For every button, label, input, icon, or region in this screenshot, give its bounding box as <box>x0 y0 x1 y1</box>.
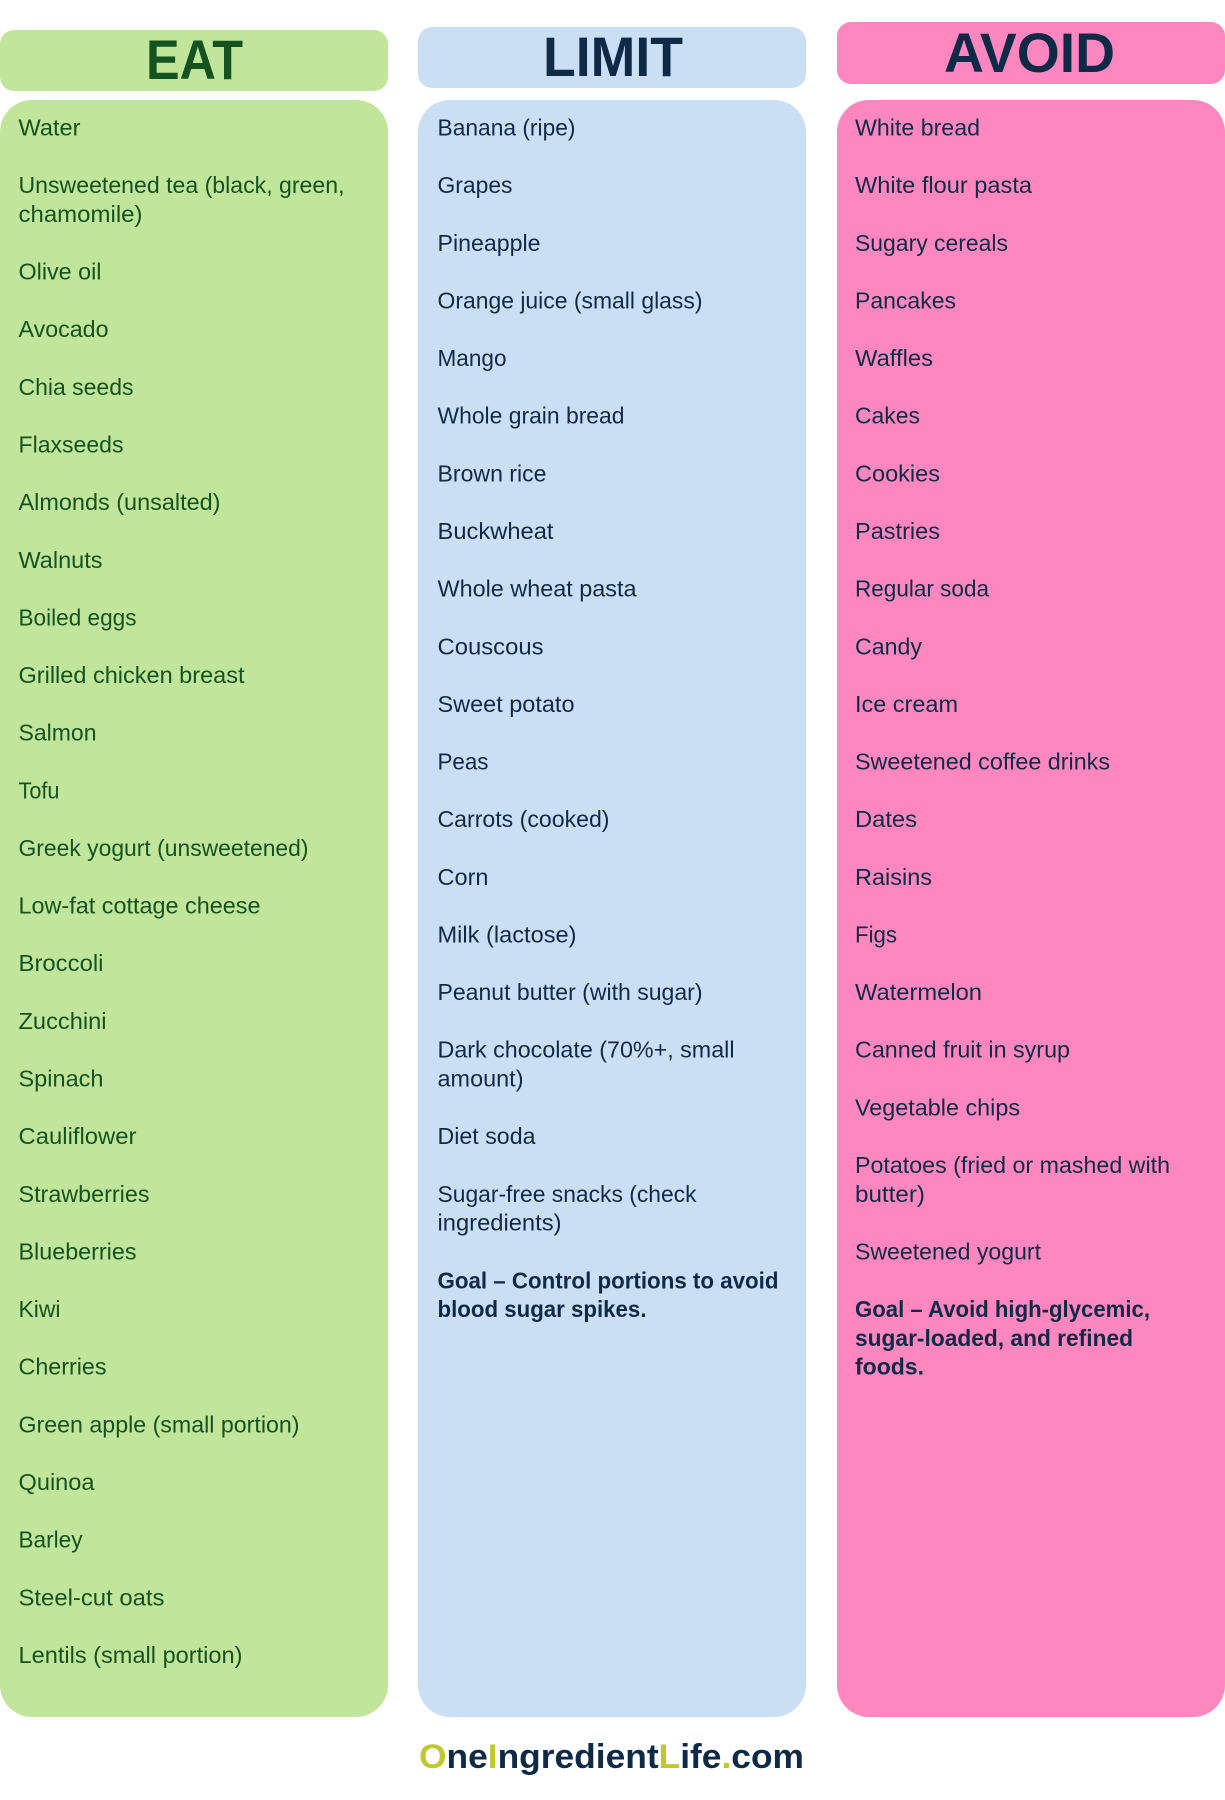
eat food list: Low-fat cottage cheese <box>18 893 260 919</box>
eat food list: Chia seeds <box>18 374 134 400</box>
eat food list: Blueberries <box>18 1238 136 1264</box>
column: eat <box>0 28 388 1717</box>
limit food list: Carrots (cooked) <box>438 806 610 832</box>
limit heading: LIMIT <box>543 25 683 88</box>
eat heading <box>0 28 388 91</box>
eat food list: Zucchini <box>18 1008 106 1034</box>
eat food list: Strawberries <box>18 1181 150 1207</box>
limit food list: amount) <box>438 1066 524 1092</box>
eat food list: Broccoli <box>18 950 104 976</box>
limit food list: Couscous <box>438 633 544 659</box>
eat food list: Kiwi <box>18 1296 60 1322</box>
limit food list: Brown rice <box>438 460 546 486</box>
eat food list: Green apple (small portion) <box>18 1411 300 1437</box>
avoid heading <box>837 21 1225 84</box>
avoid food list: Pastries <box>855 518 940 544</box>
eat food list: chamomile) <box>18 201 142 227</box>
eat food list: Steel-cut oats <box>18 1584 164 1610</box>
limit heading <box>418 25 806 88</box>
limit food list: Pineapple <box>438 230 540 256</box>
avoid food list: Cakes <box>855 403 920 429</box>
limit food list: Sugar-free snacks (check <box>438 1181 697 1207</box>
avoid panel <box>837 100 1225 1717</box>
limit food list <box>438 114 734 1236</box>
eat food list: Spinach <box>18 1066 104 1092</box>
limit food list: Grapes <box>438 172 512 198</box>
limit food list: Corn <box>438 864 488 890</box>
avoid food list: Watermelon <box>855 979 982 1005</box>
avoid food list: butter) <box>855 1181 925 1207</box>
limit food list: Peanut butter (with sugar) <box>438 979 702 1005</box>
avoid goal note <box>855 1296 1150 1380</box>
eat food list: Walnuts <box>18 547 102 573</box>
footer website brand: OneIngredientLife.com <box>419 1738 804 1776</box>
avoid goal note: sugar-loaded, and refined <box>855 1325 1133 1351</box>
avoid food list: Raisins <box>855 864 932 890</box>
avoid food list: Sugary cereals <box>855 230 1008 256</box>
limit food list: Sweet potato <box>438 691 574 717</box>
limit food list: Peas <box>438 748 488 774</box>
avoid heading: AVOID <box>944 21 1115 84</box>
eat food list: Lentils (small portion) <box>18 1642 243 1668</box>
eat food list: Almonds (unsalted) <box>18 489 221 515</box>
limit food list: Banana (ripe) <box>438 114 576 140</box>
avoid goal note: foods. <box>855 1354 924 1380</box>
avoid food list: Vegetable chips <box>855 1094 1020 1120</box>
eat food list: Water <box>18 114 81 140</box>
avoid food list: Sweetened coffee drinks <box>855 748 1110 774</box>
eat heading: EAT <box>146 28 243 91</box>
eat food list: Tofu <box>18 777 60 803</box>
limit food list: ingredients) <box>438 1210 562 1236</box>
avoid goal note: Goal – Avoid high-glycemic, <box>855 1296 1150 1322</box>
eat food list: Greek yogurt (unsweetened) <box>18 835 308 861</box>
limit food list: Whole grain bread <box>438 403 624 429</box>
eat panel <box>0 100 388 1717</box>
avoid food list: Candy <box>855 633 923 659</box>
eat food list: Boiled eggs <box>18 604 136 630</box>
avoid food list: Regular soda <box>855 576 989 602</box>
limit food list: Buckwheat <box>438 518 554 544</box>
eat food list: Olive oil <box>18 259 102 285</box>
avoid food list: Ice cream <box>855 691 958 717</box>
limit goal note: blood sugar spikes. <box>438 1296 646 1322</box>
eat food list: Barley <box>18 1527 83 1553</box>
limit food list: Dark chocolate (70%+, small <box>438 1037 734 1063</box>
column: avoid <box>837 21 1225 1717</box>
limit food list: Orange juice (small glass) <box>438 287 702 313</box>
limit food list: Whole wheat pasta <box>438 576 637 602</box>
eat food list: Avocado <box>18 316 108 342</box>
limit goal note <box>438 1267 778 1322</box>
eat food list: Grilled chicken breast <box>18 662 245 688</box>
column: limit <box>418 25 806 1717</box>
avoid food list: Canned fruit in syrup <box>855 1037 1070 1063</box>
limit food list: Milk (lactose) <box>438 922 576 948</box>
avoid food list: White bread <box>855 114 980 140</box>
eat food list: Cauliflower <box>18 1123 137 1149</box>
eat food list: Cherries <box>18 1354 106 1380</box>
avoid food list: Waffles <box>855 345 933 371</box>
avoid food list: Dates <box>855 806 917 832</box>
limit goal note: Goal – Control portions to avoid <box>438 1267 778 1293</box>
limit food list: Mango <box>438 345 506 371</box>
avoid food list: Figs <box>855 922 897 948</box>
eat food list: Unsweetened tea (black, green, <box>18 172 345 198</box>
avoid food list: Sweetened yogurt <box>855 1238 1042 1264</box>
limit food list: Diet soda <box>438 1123 536 1149</box>
limit panel <box>418 100 806 1717</box>
avoid food list: Cookies <box>855 460 940 486</box>
eat food list <box>18 114 345 1668</box>
eat food list: Flaxseeds <box>18 432 124 458</box>
avoid food list: White flour pasta <box>855 172 1032 198</box>
avoid food list <box>855 114 1170 1264</box>
eat food list: Salmon <box>18 720 96 746</box>
eat food list: Quinoa <box>18 1469 95 1495</box>
avoid food list: Pancakes <box>855 287 956 313</box>
avoid food list: Potatoes (fried or mashed with <box>855 1152 1170 1178</box>
